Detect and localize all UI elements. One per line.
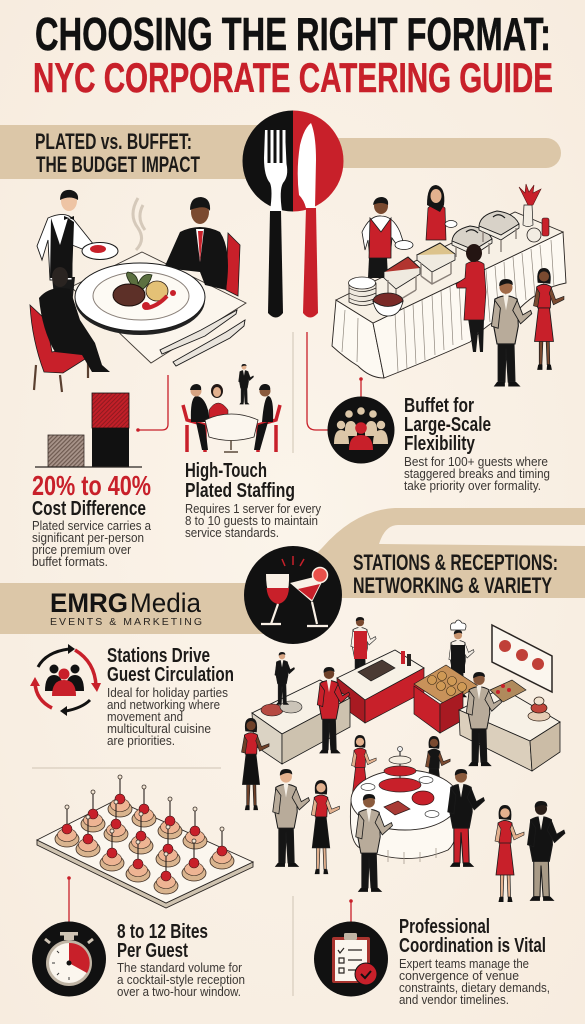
callout: professional coordination (314, 899, 550, 1007)
stat: cost difference: price premium over (32, 542, 132, 557)
coordination text (399, 916, 550, 1007)
bites text: Per Guest (117, 940, 188, 962)
plate (75, 263, 205, 335)
buffet text: Large-Scale (404, 414, 491, 436)
tiered stand (379, 746, 421, 792)
logo: EMRG Media (50, 588, 202, 628)
bites text: The standard volume for (117, 960, 243, 975)
waiter (37, 190, 118, 305)
divider and connector (293, 332, 330, 453)
staffing text: High-Touch (185, 460, 267, 482)
man beige front (356, 794, 392, 892)
connector (359, 377, 363, 398)
bites text: 8 to 12 Bites (117, 921, 208, 943)
stat: cost difference: 20% to 40% (32, 470, 151, 501)
stations text: are priorities. (107, 733, 175, 748)
stations text (107, 645, 234, 748)
buffet cloth (332, 300, 384, 378)
woman in red at table (352, 735, 376, 817)
woman in black at table (426, 736, 450, 818)
icon: guest circulation (30, 644, 101, 716)
buffet text: Flexibility (404, 433, 476, 455)
man beige (491, 279, 532, 387)
woman red (534, 268, 564, 370)
stat: cost difference (32, 470, 152, 569)
guest red (317, 667, 350, 753)
stat: cost difference: buffet formats. (32, 554, 108, 569)
menu board (492, 625, 552, 692)
diner right (164, 197, 228, 290)
illustration: stations and reception (242, 617, 565, 902)
connector: chart to staffing (136, 375, 168, 432)
stations text: Guest Circulation (107, 664, 234, 686)
woman red right (495, 805, 524, 902)
icon: stopwatch (32, 922, 106, 996)
illustration: small dining table (183, 364, 280, 452)
buffet text: Best for 100+ guests where (404, 454, 548, 469)
illustration: plated dinner (30, 190, 246, 392)
icon: crowd (328, 396, 394, 464)
chafing dishes (384, 211, 519, 302)
coordination text: Expert teams manage the (399, 956, 529, 971)
woman left (242, 718, 269, 810)
man grey left (273, 769, 309, 867)
steam (133, 198, 145, 250)
title (33, 8, 553, 101)
stations text: movement and (107, 709, 183, 724)
stat: cost difference: significant per-person (32, 530, 144, 545)
coordination text: and vendor timelines. (399, 992, 509, 1007)
staffing text: service standards. (185, 525, 279, 540)
logo: EMRG Media: EMRG (50, 588, 128, 618)
buffet text (404, 395, 550, 493)
cutlery (160, 310, 245, 366)
buffet text: Buffet for (404, 395, 474, 417)
guest at buffet (456, 244, 486, 352)
connector (67, 876, 71, 922)
stations text: and networking where (107, 697, 220, 712)
stations text: Ideal for holiday parties (107, 685, 228, 700)
chef two (449, 620, 474, 697)
icon: clipboard (314, 922, 388, 996)
vase and flowers (519, 184, 549, 242)
man black right (527, 801, 565, 901)
section band: plated vs buffet (0, 125, 561, 179)
buffet text: take priority over formality. (404, 478, 541, 493)
section band: plated vs buffet: PLATED vs. BUFFET: (35, 129, 192, 154)
callout: bites per guest (32, 876, 245, 999)
left station (252, 680, 350, 764)
diner front (39, 267, 110, 372)
bites text: over a two-hour window. (117, 984, 241, 999)
bites text (117, 921, 245, 999)
logo: EMRG Media: EVENTS & MARKETING (50, 616, 202, 628)
coordination text: convergence of venue (399, 968, 519, 983)
logo: EMRG Media: Media (130, 588, 202, 618)
stations text: Stations Drive (107, 645, 210, 667)
icon: toasting glasses (244, 546, 342, 644)
right station (459, 680, 560, 771)
staffing text: Requires 1 server for every (185, 501, 321, 516)
server left (275, 652, 295, 705)
plates and bowl (348, 277, 403, 316)
chair right (226, 233, 240, 296)
table (71, 252, 246, 363)
illustration: canape tray (37, 775, 253, 908)
central station (337, 650, 424, 723)
section band: stations (0, 508, 585, 634)
illustration: buffet (332, 184, 566, 387)
coordination text: Professional (399, 916, 490, 938)
chef one (351, 617, 376, 684)
coordination text: constraints, dietary demands, (399, 980, 550, 995)
woman chatting (311, 780, 339, 874)
staffing text: Plated Staffing (185, 480, 295, 502)
stations text: multicultural cuisine (107, 721, 211, 736)
bites text: a cocktail-style reception (117, 972, 245, 987)
staffing text (185, 460, 321, 540)
stat: cost difference: Plated service carries a (32, 518, 152, 533)
server (362, 197, 413, 278)
red chair front (30, 305, 93, 392)
icon: fork and knife (242, 110, 344, 318)
guest beige station (466, 672, 502, 766)
buffet text: staggered breaks and timing (404, 466, 550, 481)
dessert station (414, 665, 478, 733)
woman at buffet (426, 185, 457, 240)
callout: buffet (328, 377, 550, 493)
round table (350, 770, 459, 864)
man black red trousers (448, 769, 484, 867)
connector (349, 899, 353, 922)
section band: plated vs buffet: THE BUDGET IMPACT (36, 152, 200, 177)
staffing text: 8 to 10 guests to maintain (185, 513, 318, 528)
bar chart: cost difference (35, 393, 142, 467)
stat: cost difference: Cost Difference (32, 498, 146, 520)
